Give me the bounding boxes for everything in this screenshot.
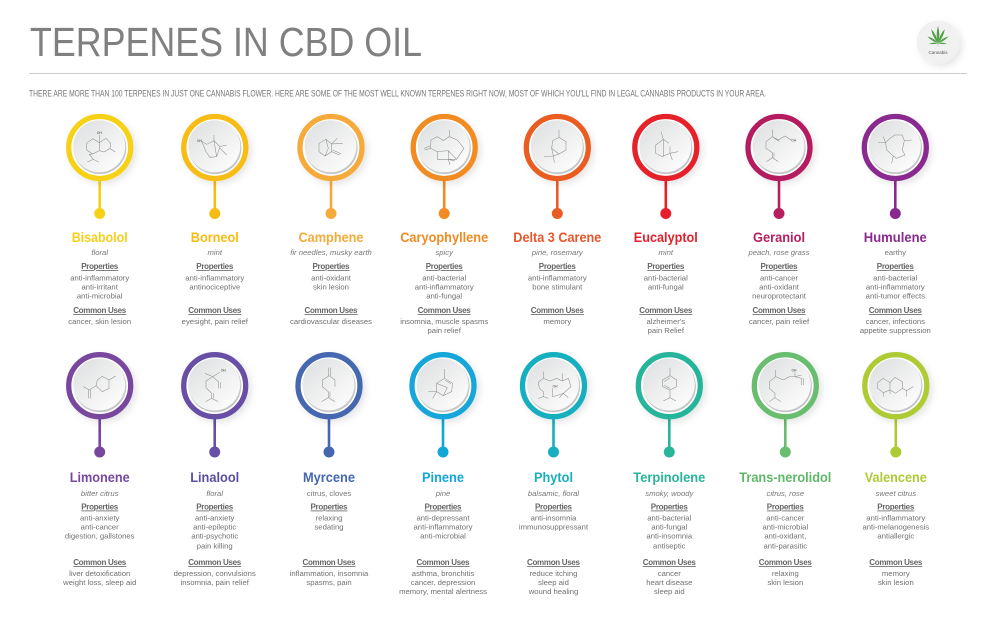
name: Borneol: [191, 230, 239, 245]
properties: immunosuppressant: [519, 522, 589, 532]
icon: Delta 3 Carene molecule badge: [526, 116, 588, 178]
common uses: Common Uses: [527, 558, 581, 567]
properties: anti-microbial: [420, 532, 466, 540]
properties: digestion, gallstones: [65, 532, 135, 540]
common uses: Common Uses: [304, 306, 358, 315]
panel: Terpinolene: [633, 355, 706, 596]
properties: Properties: [310, 502, 348, 512]
properties: anti-microbial: [77, 292, 123, 300]
panel: Caryophyllene: [400, 116, 489, 335]
common uses: cancer, pain relief: [749, 317, 810, 326]
common uses: memory: [543, 317, 571, 326]
common uses: eyesight, pain relief: [182, 317, 249, 326]
common uses: Common Uses: [752, 306, 806, 315]
aroma: pine: [435, 489, 450, 498]
properties: Properties: [312, 262, 350, 271]
aroma: fir needles, musky earth: [290, 248, 372, 257]
properties: anti-psychotic: [191, 532, 238, 540]
common uses: skin lesion: [767, 578, 803, 587]
aroma: pine, rosemary: [531, 248, 584, 257]
properties: [310, 502, 348, 532]
name: Linalool: [190, 470, 239, 485]
aroma: citrus, cloves: [307, 489, 351, 498]
panel: Delta 3 Carene: [513, 116, 602, 326]
properties: Properties: [647, 262, 685, 271]
stem and dot: [664, 416, 675, 458]
properties: Properties: [81, 262, 119, 271]
properties: antinociceptive: [189, 282, 240, 292]
properties: anti-inflammatory: [866, 282, 925, 292]
properties: [866, 262, 925, 300]
properties: anti-inflammatory: [866, 514, 925, 522]
aroma: earthy: [885, 248, 906, 257]
properties: anti-insomnia: [646, 532, 693, 540]
common uses: [290, 558, 369, 587]
stem and dot: [326, 178, 336, 219]
name: Trans-nerolidol: [739, 470, 831, 485]
properties: anti-bacterial: [873, 274, 918, 282]
properties: anti-oxidant: [759, 282, 800, 292]
panel: Linalool: [174, 355, 256, 587]
properties: [752, 262, 807, 300]
common uses: [62, 558, 136, 587]
properties: [644, 262, 688, 292]
properties: Properties: [539, 262, 576, 271]
common uses: Common Uses: [869, 306, 922, 315]
properties: Properties: [196, 502, 234, 512]
icon: Pinene molecule badge: [412, 355, 474, 417]
name: Caryophyllene: [400, 230, 489, 245]
common uses: cardiovascular diseases: [290, 317, 372, 326]
properties: Properties: [426, 262, 463, 271]
properties: anti-oxidant,: [764, 532, 806, 540]
properties: [762, 502, 808, 550]
common uses: Common Uses: [188, 306, 242, 315]
icon: Eucalyptol molecule badge: [635, 116, 697, 178]
common uses: Common Uses: [639, 306, 693, 315]
common uses: memory, mental alertness: [399, 587, 487, 596]
stem and dot: [94, 416, 105, 458]
panel: Bisabolol: [68, 116, 131, 326]
aroma: balsamic, floral: [528, 489, 579, 498]
common uses: weight loss, sleep aid: [62, 578, 136, 587]
properties: anti-cancer: [760, 274, 798, 282]
common uses: skin lesion: [878, 578, 914, 587]
panel: Myrcene: [290, 355, 369, 587]
properties: [519, 502, 589, 532]
properties: anti-cancer: [81, 522, 119, 532]
common uses: [68, 306, 131, 326]
name: Bisabolol: [72, 230, 128, 245]
common uses: relaxing: [772, 569, 799, 578]
stem and dot: [209, 178, 220, 219]
name: Eucalyptol: [634, 230, 698, 245]
common uses: insomnia, muscle spasms: [400, 317, 488, 326]
properties: [65, 502, 135, 540]
icon: Limonene molecule badge: [69, 355, 131, 417]
properties: anti-inflammatory: [528, 274, 587, 282]
properties: anti-tumor effects: [866, 292, 925, 300]
properties: sedating: [314, 522, 344, 532]
properties: Properties: [877, 262, 914, 271]
common uses: [643, 558, 696, 596]
common uses: inflammation, insomnia: [290, 569, 369, 578]
icon: Camphene molecule badge: [300, 116, 362, 178]
stem and dot: [94, 178, 105, 219]
properties: Properties: [767, 502, 804, 512]
panel: Pinene: [399, 355, 487, 596]
aroma: mint: [208, 248, 223, 257]
properties: anti-cancer: [766, 514, 805, 522]
aroma: sweet citrus: [876, 489, 916, 498]
common uses: cancer, depression: [411, 578, 475, 587]
common uses: [531, 306, 584, 326]
common uses: cancer, skin lesion: [68, 317, 131, 326]
icon: Caryophyllene molecule badge: [413, 116, 475, 178]
common uses: [290, 306, 372, 326]
common uses: spasms, pain: [306, 578, 352, 587]
properties: pain killing: [197, 542, 233, 550]
common uses: [527, 558, 581, 596]
aroma: floral: [91, 248, 108, 257]
properties: anti-parasitic: [764, 542, 807, 550]
stem and dot: [780, 416, 791, 458]
panel: Valencene: [862, 355, 929, 587]
common uses: reduce itching: [530, 569, 577, 578]
icon: Geraniol molecule badge: OH: [791, 139, 797, 143]
properties: [311, 262, 352, 292]
properties: neuroprotectant: [752, 292, 807, 300]
icon: Valencene molecule badge: [865, 355, 927, 417]
common uses: Common Uses: [73, 558, 127, 567]
common uses: [174, 558, 256, 587]
icon: Phytol molecule badge: [522, 355, 584, 417]
panel: Borneol: [182, 116, 249, 326]
common uses: liver detoxification: [69, 569, 130, 578]
common uses: Common Uses: [188, 558, 242, 567]
common uses: cancer, infections: [866, 317, 925, 326]
icon: Trans-nerolidol molecule badge: OH: [791, 368, 797, 372]
common uses: [749, 306, 810, 326]
name: Camphene: [298, 230, 364, 245]
properties: Properties: [877, 502, 915, 512]
stem and dot: [890, 416, 901, 458]
properties: anti-fungal: [426, 292, 462, 300]
properties: [191, 502, 238, 550]
stem and dot: [552, 178, 563, 219]
stem and dot: [890, 178, 901, 219]
common uses: sleep aid: [538, 578, 569, 587]
common uses: [759, 558, 812, 587]
properties: anti-melanogenesis: [862, 522, 929, 532]
common uses: alzheimer's: [646, 317, 685, 326]
properties: skin lesion: [313, 282, 349, 292]
properties: anti-fungal: [651, 522, 688, 532]
properties: anti-inflammatory: [414, 522, 473, 532]
aroma: bitter citrus: [81, 489, 119, 498]
properties: anti-oxidant: [311, 274, 352, 282]
properties: anti-inflammatory: [415, 282, 474, 292]
aroma: peach, rose grass: [747, 248, 810, 257]
properties: Properties: [760, 262, 798, 271]
common uses: Common Uses: [418, 306, 471, 315]
properties: antiseptic: [653, 542, 686, 550]
stem and dot: [209, 416, 220, 458]
common uses: [860, 306, 931, 335]
stem and dot: [774, 178, 784, 219]
icon: Linalool molecule badge: [184, 355, 246, 417]
name: Delta 3 Carene: [513, 230, 602, 245]
common uses: wound healing: [528, 587, 578, 596]
properties: anti-anxiety: [195, 514, 235, 522]
stem and dot: [548, 416, 559, 458]
icon: Geraniol molecule badge: [748, 116, 810, 178]
name: Terpinolene: [633, 470, 706, 485]
aroma: citrus, rose: [767, 489, 804, 498]
common uses: Common Uses: [73, 306, 127, 315]
properties: [528, 262, 587, 292]
properties: Properties: [196, 262, 234, 271]
icon: Linalool molecule badge: OH: [221, 368, 226, 372]
common uses: [400, 306, 488, 335]
icon: Borneol molecule badge: OH: [197, 139, 202, 143]
common uses: appetite suppression: [860, 326, 931, 335]
common uses: pain relief: [428, 326, 462, 335]
properties: [70, 262, 129, 300]
properties: anti-microbial: [762, 522, 808, 532]
properties: bone stimulant: [532, 282, 583, 292]
panel: Geraniol: [747, 116, 810, 326]
name: Valencene: [865, 470, 927, 485]
properties: [646, 502, 693, 550]
name: Myrcene: [303, 470, 355, 485]
icon: Bisabolol molecule badge: [69, 116, 131, 178]
common uses: Common Uses: [531, 306, 584, 315]
icon: Trans-nerolidol molecule badge: [754, 355, 816, 417]
title: TERPENES IN CBD OIL: [30, 19, 422, 65]
panel: Eucalyptol: [634, 116, 698, 335]
properties: anti-fungal: [648, 282, 684, 292]
properties: [415, 262, 474, 300]
stem and dot: [324, 416, 334, 458]
panel: Limonene: [62, 355, 136, 587]
common uses: [182, 306, 249, 326]
common uses: Common Uses: [759, 558, 812, 567]
properties: anti-bacterial: [422, 274, 466, 282]
aroma: smoky, woody: [645, 489, 695, 498]
properties: anti-anxiety: [80, 514, 120, 522]
name: Pinene: [422, 470, 464, 485]
common uses: Common Uses: [416, 558, 470, 567]
properties: [414, 502, 473, 540]
properties: anti-irritant: [82, 282, 119, 292]
properties: relaxing: [316, 514, 342, 522]
panel: Humulene: [860, 116, 931, 335]
common uses: cancer: [658, 569, 681, 578]
common uses: heart disease: [646, 578, 692, 587]
icon: Myrcene molecule badge: [298, 355, 360, 417]
properties: [862, 502, 929, 540]
common uses: [399, 558, 487, 596]
name: Geraniol: [753, 230, 805, 245]
common uses: memory: [882, 569, 910, 578]
common uses: sleep aid: [654, 587, 685, 596]
properties: anti-inflammatory: [185, 274, 244, 282]
properties: anti-depressant: [416, 514, 470, 522]
panel: Phytol: [519, 355, 589, 596]
aroma: spicy: [435, 248, 454, 257]
common uses: Common Uses: [302, 558, 356, 567]
common uses: Common Uses: [869, 558, 923, 567]
properties: anti-epileptic: [193, 522, 236, 532]
panel: Trans-nerolidol: [739, 355, 831, 587]
stem and dot: [660, 178, 671, 219]
icon: Phytol molecule badge: OH: [552, 384, 558, 388]
properties: anti-inflammatory: [70, 274, 129, 282]
stem and dot: [438, 416, 448, 458]
properties: Properties: [81, 502, 119, 512]
aroma: mint: [659, 248, 674, 257]
properties: Properties: [424, 502, 462, 512]
properties: antiallergic: [877, 532, 914, 540]
common uses: pain Relief: [648, 326, 685, 335]
common uses: [639, 306, 693, 335]
properties: anti-bacterial: [644, 274, 688, 282]
icon: Terpinolene molecule badge: [638, 355, 700, 417]
icon: Humulene molecule badge: [864, 116, 926, 178]
common uses: Common Uses: [643, 558, 696, 567]
name: Humulene: [864, 230, 927, 245]
icon: Borneol molecule badge: [184, 116, 246, 178]
aroma: floral: [206, 489, 223, 498]
properties: anti-bacterial: [647, 514, 692, 522]
properties: anti-insomnia: [531, 514, 577, 522]
logo: cannabis badge: Cannabis: [928, 50, 948, 55]
name: Limonene: [70, 470, 130, 485]
common uses: asthma, bronchitis: [412, 569, 474, 578]
stem and dot: [439, 178, 450, 219]
properties: Properties: [651, 502, 688, 512]
panel: Camphene: [290, 116, 372, 326]
common uses: depression, convulsions: [174, 569, 256, 578]
properties: Properties: [535, 502, 573, 512]
properties: [185, 262, 244, 292]
common uses: insomnia, pain relief: [181, 578, 250, 587]
logo: cannabis badge: [916, 20, 960, 64]
common uses: [869, 558, 923, 587]
name: Phytol: [534, 470, 573, 485]
icon: Bisabolol molecule badge: OH: [97, 131, 102, 135]
